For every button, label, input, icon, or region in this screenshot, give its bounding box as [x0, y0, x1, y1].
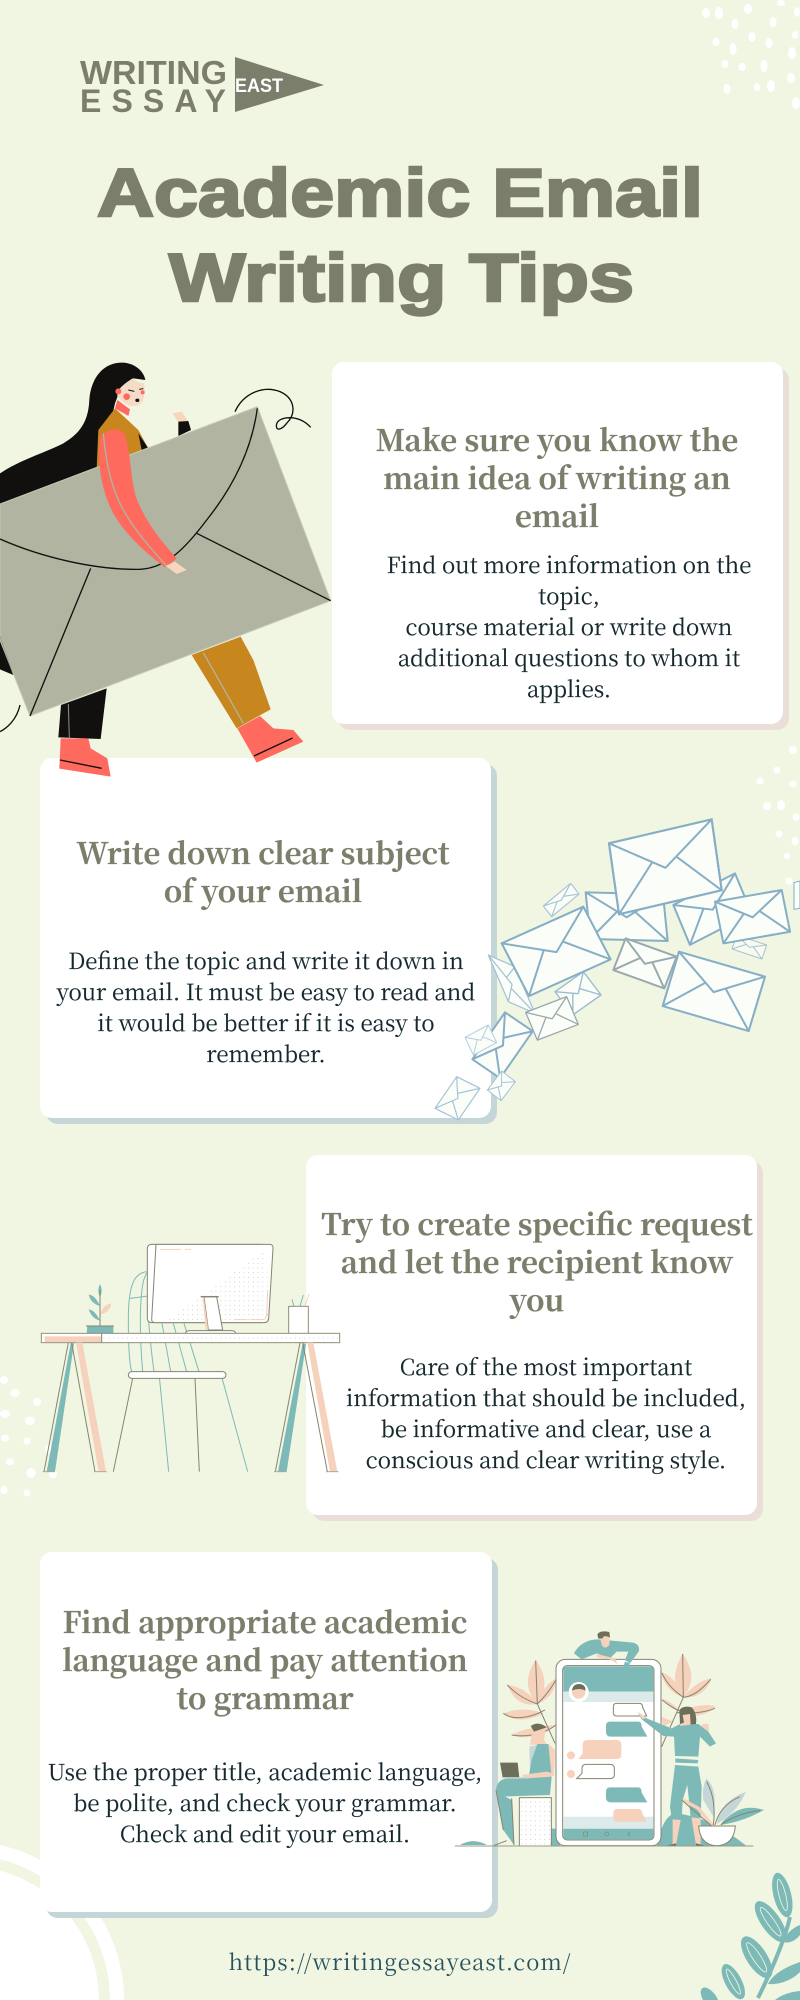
heading: tip 1: email [515, 494, 599, 536]
body text: tip 2: remember. [206, 1037, 326, 1069]
heading: tip 1: main idea of writing an [383, 456, 731, 498]
body text: tip 3 [346, 1350, 746, 1475]
body text: tip 3: Care of the most important [400, 1350, 692, 1382]
heading: tip 4: Find appropriate academic [63, 1600, 467, 1642]
title: Writing Tips [169, 240, 634, 316]
body text: tip 3: information that should be included, [346, 1381, 746, 1413]
heading: tip 4 [62, 1600, 468, 1718]
heading: tip 3: you [510, 1278, 564, 1320]
logo: EAST [235, 76, 283, 97]
heading: tip 3 [321, 1202, 753, 1320]
body text: tip 2: it would be better if it is easy to [97, 1006, 435, 1038]
body text: tip 4: Check and edit your email. [120, 1817, 410, 1849]
potted plant [682, 1778, 764, 1846]
body text: tip 3: conscious and clear writing style. [366, 1443, 726, 1475]
heading: tip 1 [376, 418, 738, 536]
seated man [493, 1724, 555, 1846]
body text: tip 4: be polite, and check your grammar. [73, 1786, 457, 1818]
body text: tip 2: your email. It must be easy to read and [57, 975, 475, 1007]
phone [556, 1659, 661, 1846]
logo: WRITING [80, 54, 227, 91]
body text: tip 1 [387, 548, 751, 704]
panel: tip 1 [332, 362, 783, 724]
plants behind phone [503, 1653, 716, 1737]
body text: tip 2: Define the topic and write it down in [68, 944, 464, 976]
body text: tip 2 [56, 944, 475, 1069]
logo: ESSAY [80, 83, 226, 119]
heading: tip 4: language and pay attention [62, 1638, 468, 1680]
body text: tip 1: additional questions to whom it [398, 641, 740, 673]
body text: tip 1: topic, [538, 579, 600, 611]
panel: tip 4 [40, 1552, 492, 1912]
heading: tip 2: of your email [164, 869, 362, 911]
top man [574, 1631, 639, 1683]
body text: tip 1: course material or write down [406, 610, 732, 642]
panel: tip 3 [306, 1155, 757, 1515]
body text: tip 3: be informative and clear, use a [381, 1412, 711, 1444]
body text: tip 4 [48, 1755, 482, 1849]
body text: tip 4: Use the proper title, academic language, [48, 1755, 482, 1787]
heading: tip 1: Make sure you know the [376, 418, 738, 460]
heading: tip 4: to grammar [176, 1676, 354, 1718]
body text: tip 1: Find out more information on the [387, 548, 751, 580]
heading: tip 2 [76, 831, 450, 911]
title: Academic Email [97, 155, 703, 231]
panel: tip 2 [40, 758, 491, 1118]
standing woman [637, 1707, 716, 1846]
body text: tip 1: applies. [527, 672, 611, 704]
heading: tip 2: Write down clear subject [76, 831, 450, 873]
heading: tip 3: Try to create specific request [321, 1202, 753, 1244]
website url: https://writingessayeast.com/ [228, 1946, 572, 1977]
heading: tip 3: and let the recipient know [341, 1240, 733, 1282]
